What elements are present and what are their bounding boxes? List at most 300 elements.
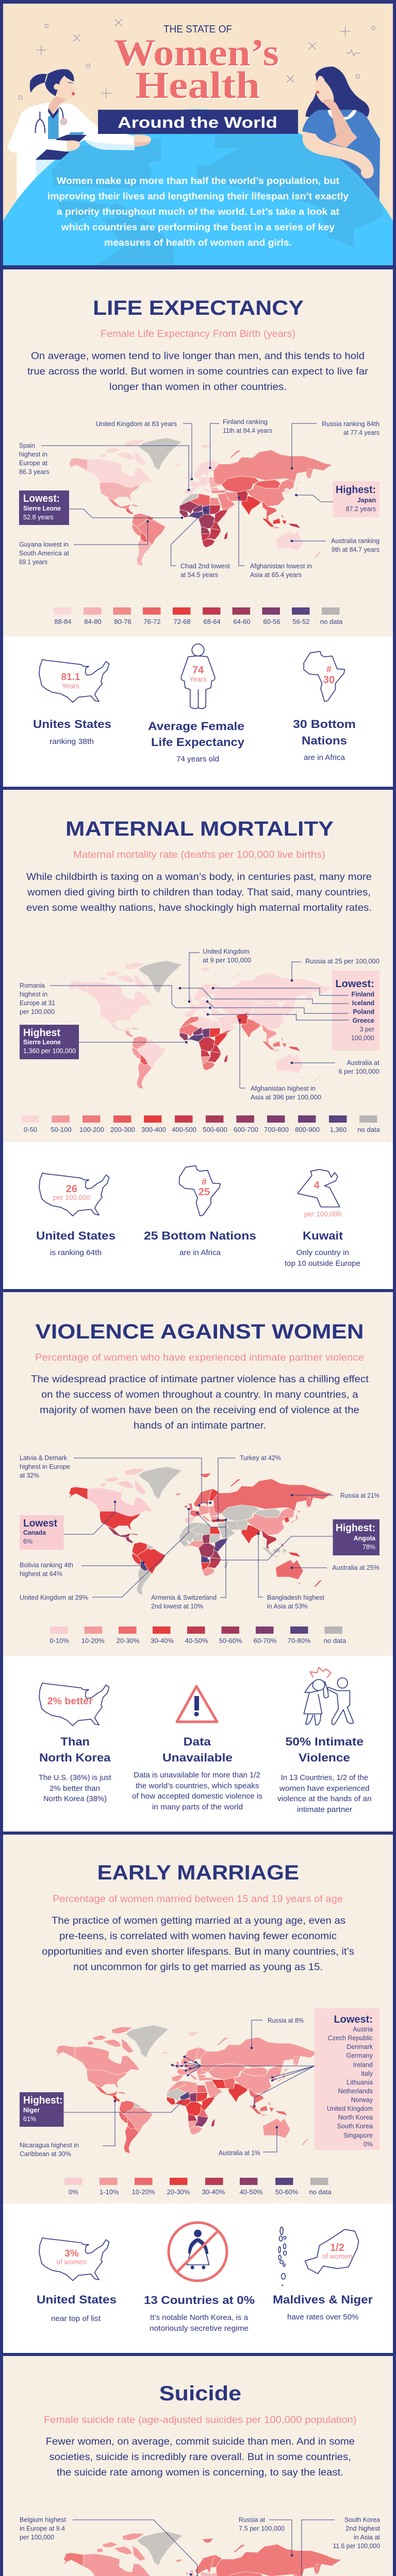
- text block: the suicide rate among women is concerning, to say the least.: [57, 2467, 343, 2478]
- stat: us years: [61, 672, 80, 690]
- callout: russia: [291, 1492, 380, 1499]
- callout: highest japan: Highest:: [336, 484, 376, 496]
- callout: turkey: Turkey at 42%: [240, 1454, 281, 1462]
- intro text: measures of health of women and girls.: [104, 237, 292, 248]
- callout: finland: Finland ranking: [223, 418, 268, 426]
- legend: no data: [324, 1637, 346, 1645]
- world map: life expectancy: [69, 438, 332, 566]
- callout: south korea: South Korea: [344, 2516, 380, 2523]
- stat heading: bottom nations: are in Africa: [304, 753, 345, 762]
- callout: romania: [20, 982, 211, 1015]
- icon: female figure: [181, 644, 215, 708]
- stat: rank 25: 25: [199, 1187, 210, 1198]
- callout: armenia and switzerland: Armenia & Switzerland: [151, 1594, 217, 1601]
- stat: us percent: [57, 2248, 87, 2266]
- legend: 0-10%: [50, 1637, 69, 1645]
- legend: 80-76: [114, 618, 131, 625]
- callout: latvia and denmark: Latvia & Demark: [20, 1454, 68, 1462]
- callout: lowest sierra leone: Lowest:: [23, 493, 60, 504]
- callout: russia: [251, 2017, 304, 2049]
- callout: lowest list: Iceland: [352, 999, 374, 1007]
- text block: on the success of women throughout a country. In many countries, a: [41, 1389, 358, 1400]
- legend: 88-84: [54, 618, 72, 625]
- callout: afghanistan: [239, 1019, 321, 1101]
- legend: 60-70%: [254, 1637, 277, 1645]
- stat heading: kuwait: Kuwait: [303, 1229, 343, 1242]
- icon: africa outline: [304, 651, 345, 702]
- stat heading: bottom nations: [293, 718, 356, 762]
- stat heading: bottom nations: [144, 1229, 256, 1257]
- callout: highest niger: 61%: [23, 2115, 36, 2123]
- legend: 50-100: [51, 1126, 72, 1133]
- legend: 56-52: [292, 618, 310, 625]
- panel: life expectancy stats: [3, 637, 393, 787]
- heading: Suicide: [159, 2382, 241, 2405]
- callout: lowest list: North Korea: [338, 2114, 373, 2121]
- callout: highest sierra leone: 1,360 per 100,000: [23, 1047, 76, 1055]
- callout: lowest list: Lithuania: [346, 2079, 373, 2086]
- intro text: [47, 175, 349, 248]
- panel: violence stats: [3, 1656, 393, 1832]
- legend: 68-64: [203, 618, 221, 625]
- icon: no child bride: [169, 2223, 227, 2281]
- stat: kuwait rate: [304, 1180, 341, 1218]
- stat: rank 30: #: [326, 664, 332, 674]
- callout: south korea: in Asia at: [354, 2534, 381, 2541]
- callout: australia: [219, 2126, 278, 2157]
- text block: On average, women tend to live longer than men, and this tends to hold: [31, 351, 365, 362]
- text block: Fewer women, on average, commit suicide than men. And in some: [46, 2436, 355, 2447]
- callout: highest sierra leone: Sierre Leone: [23, 1039, 61, 1046]
- text block: societies, suicide is incredibly rare overall. But in some countries,: [50, 2452, 351, 2463]
- stat heading: thirteen countries: notoriously secretive regime: [150, 2324, 249, 2333]
- callout: australia: [291, 1564, 380, 1571]
- text block: not uncommon for girls to get married as young as 15.: [73, 1962, 323, 1973]
- stat: us rate: [53, 1183, 90, 1201]
- legend: 70-80%: [288, 1637, 311, 1645]
- stat heading: intimate violence: 50% Intimate: [286, 1735, 364, 1748]
- callout: guyana: 69.1 years: [19, 558, 47, 566]
- stat heading: intimate violence: women have experienced: [279, 1784, 369, 1793]
- stat heading: thirteen countries: It’s notable North Korea, is a: [150, 2313, 249, 2322]
- callout: bangladesh: in Asia at 53%: [267, 1603, 308, 1610]
- stat: kuwait rate: 4: [314, 1180, 320, 1191]
- stat heading: average: [148, 720, 245, 764]
- stat heading: united states: [37, 2293, 117, 2323]
- globe continents: [52, 135, 384, 265]
- callout: chad: at 54.5 years: [180, 571, 218, 579]
- callout: russia: Russia at 25 per 100,000: [305, 958, 380, 965]
- text block: The widespread practice of intimate partner violence has a chilling effect: [31, 1374, 369, 1385]
- stat heading: average: Life Expectancy: [151, 736, 245, 749]
- stat heading: intimate violence: In 13 Countries, 1/2 of the: [281, 1773, 368, 1782]
- callout: guyana: Guyana lowest in: [19, 541, 69, 548]
- text block: [27, 351, 369, 393]
- callout: bolivia: [20, 1562, 144, 1578]
- callout: lowest sierra leone: [19, 490, 183, 525]
- callout: russia: Russia at 8%: [268, 2017, 304, 2024]
- icon: kuwait outline: [298, 1170, 340, 1207]
- callout: highest japan: [295, 481, 380, 517]
- stat heading: intimate violence: Violence: [299, 1751, 350, 1764]
- text block: The practice of women getting married at a young age, even as: [52, 1916, 345, 1926]
- text block: While childbirth is taxing on a woman’s body, in centuries past, many more: [26, 872, 372, 883]
- callout: highest niger: [20, 2092, 187, 2127]
- callout: united kingdom: [96, 420, 193, 480]
- legend: 10-20%: [81, 1637, 105, 1645]
- intro text: improving their lives and lengthening their lifespan isn’t exactly: [47, 191, 349, 201]
- legend: 20-30%: [117, 1637, 140, 1645]
- callout: lowest list: Poland: [353, 1008, 374, 1015]
- icon: maldives islands: [278, 2227, 286, 2286]
- callout: highest sierra leone: [20, 1025, 188, 1059]
- legend: 100-200: [79, 1126, 104, 1133]
- callout: russia: Russia at: [239, 2516, 266, 2523]
- stat heading: than north korea: Than: [61, 1735, 90, 1748]
- stat heading: data unavailable: of how accepted domestic violence is: [132, 1792, 262, 1801]
- text block: [46, 2436, 355, 2478]
- legend: 0-50: [24, 1126, 37, 1133]
- heading: EARLY MARRIAGE: [97, 1861, 299, 1884]
- decorative medical symbols: [19, 19, 375, 99]
- callout: lowest canada: [20, 1501, 116, 1550]
- icon: violent couple: [304, 1668, 354, 1725]
- callout: belgium: [20, 2516, 199, 2576]
- stat: half of women: [322, 2242, 352, 2260]
- stat: us percent: of women: [57, 2258, 87, 2266]
- stat heading: intimate violence: violence at the hands of an: [277, 1794, 371, 1803]
- callout: lowest canada: 6%: [23, 1538, 32, 1545]
- world map: suicide: [63, 2531, 341, 2576]
- callout: spain: 86.3 years: [19, 468, 50, 476]
- callout: united kingdom: United Kingdom at 83 years: [96, 420, 177, 428]
- callout: lowest list: Italy: [361, 2070, 373, 2077]
- subtitle: Female Life Expectancy From Birth (years): [101, 329, 295, 340]
- panel: life expectancy: [3, 269, 393, 637]
- subtitle: Maternal mortality rate (deaths per 100,000 live births): [73, 850, 325, 860]
- panel: suicide: [3, 2356, 393, 2576]
- legend: 64-60: [233, 618, 251, 625]
- callout: australia: [291, 537, 380, 553]
- callout: afghanistan: [238, 497, 312, 579]
- stat: half of women: 1/2: [330, 2242, 344, 2253]
- stat: kuwait rate: per 100,000: [304, 1210, 341, 1218]
- stat heading: maldives and niger: [273, 2293, 373, 2321]
- legend: no data: [309, 2188, 332, 2196]
- stat: us rate: 26: [66, 1183, 77, 1195]
- panel: early marriage stats: [3, 2204, 393, 2353]
- callout: highest angola: Angola: [354, 1535, 376, 1542]
- stat heading: maldives and niger: have rates over 50%: [287, 2313, 359, 2321]
- callout: latvia and denmark: [20, 1454, 211, 1506]
- text block: pre-teens, is correlated with women having fewer economic: [59, 1931, 337, 1942]
- text block: women died giving birth to children than today. That said, many countries,: [27, 887, 371, 898]
- callout: highest niger: Highest:: [23, 2095, 63, 2106]
- callout: south korea: 2nd highest: [345, 2525, 381, 2532]
- callout: united kingdom: at 9 per 100,000: [203, 957, 251, 964]
- stat heading: data unavailable: Data is unavailable for more than 1/2: [134, 1771, 260, 1780]
- legend: no data: [320, 618, 343, 625]
- callout: lowest list: [171, 2008, 380, 2150]
- stat heading: data unavailable: Unavailable: [162, 1751, 233, 1764]
- legend: 20-30%: [167, 2188, 190, 2196]
- callout: romania: Europe at 31: [20, 999, 55, 1007]
- subtitle: Percentage of women who have experienced intimate partner violence: [35, 1352, 364, 1363]
- world map: maternal mortality: [69, 961, 332, 1089]
- callout: afghanistan: Afghanistan highest in: [251, 1085, 316, 1092]
- icon: africa outline: [179, 1166, 220, 1216]
- callout: finland: [209, 418, 272, 469]
- legend: 50-60%: [275, 2188, 299, 2196]
- legend: 10-20%: [132, 2188, 155, 2196]
- stat: average years: 74: [192, 665, 204, 676]
- legend: 500-600: [203, 1126, 227, 1133]
- stat heading: than north korea: North Korea: [39, 1751, 111, 1764]
- text block: even some wealthy nations, have shockingly high maternal mortality rates.: [26, 903, 372, 913]
- callout: lowest list: Lowest:: [334, 2014, 373, 2025]
- callout: russia: Russia ranking 84th: [322, 420, 380, 428]
- legend: 60-56: [263, 618, 280, 625]
- callout: lowest list: South Korea: [337, 2123, 373, 2130]
- stat heading: thirteen countries: 13 Countries at 0%: [144, 2294, 255, 2307]
- stat heading: thirteen countries: [144, 2294, 255, 2333]
- text block: majority of women have been on the receiving end of violence at the: [40, 1405, 359, 1416]
- callout: bangladesh: [257, 1533, 325, 1610]
- stat heading: kuwait: [285, 1229, 360, 1268]
- callout: latvia and denmark: highest in Europe: [20, 1463, 70, 1470]
- illustration: patient arms: [303, 99, 374, 179]
- callout: lowest list: United Kingdom: [327, 2105, 373, 2112]
- callout: turkey: [217, 1454, 281, 1521]
- callout: australia: Australia ranking: [331, 537, 380, 545]
- stat: two percent better: 2% better: [47, 1696, 93, 1707]
- callout: highest sierra leone: Highest: [23, 1027, 60, 1039]
- title: Health: [135, 64, 260, 107]
- callout: afghanistan: Asia at 396 per 100,000: [251, 1094, 321, 1101]
- legend: 30-40%: [151, 1637, 174, 1645]
- legend: 1,360: [330, 1126, 346, 1133]
- callout: armenia and switzerland: 2nd lowest at 10%: [151, 1603, 203, 1610]
- callout: highest angola: Highest:: [336, 1522, 375, 1534]
- title: [114, 24, 280, 108]
- legend: 400-500: [172, 1126, 196, 1133]
- legend: 0%: [69, 2188, 78, 2196]
- title: Women’s: [114, 32, 279, 74]
- callout: lowest list: Netherlands: [338, 2088, 373, 2095]
- callout: guyana: South America at: [19, 550, 70, 557]
- stat: us rate: per 100,000: [53, 1194, 90, 1201]
- legend: 40-50%: [185, 1637, 208, 1645]
- stat heading: united states: is ranking 64th: [50, 1248, 102, 1257]
- callout: highest niger: Niger: [23, 2107, 40, 2114]
- subtitle: Female suicide rate (age-adjusted suicides per 100,000 population): [44, 2415, 357, 2426]
- illustration: doctor arm and clipboard: [36, 120, 151, 160]
- callout: lowest list: 0%: [364, 2141, 373, 2148]
- illustration: patient body: [302, 66, 380, 201]
- intro text: a priority throughout much of the world. Let’s take a look at: [57, 206, 339, 217]
- stat heading: united states: United States: [37, 2293, 117, 2306]
- stat heading: bottom nations: 25 Bottom Nations: [144, 1229, 256, 1242]
- callout: bolivia: Bolivia ranking 4th: [20, 1562, 73, 1569]
- legend: 200-300: [110, 1126, 135, 1133]
- stat heading: data unavailable: Data: [184, 1735, 211, 1748]
- stat: us years: 81.1: [61, 672, 80, 683]
- text block: true across the world. But women in some countries can expect to live far: [27, 366, 369, 377]
- callout: lowest list: Lowest:: [335, 978, 374, 990]
- callout: russia: 7.5 per 100,000: [239, 2525, 285, 2532]
- intro text: which countries are performing the best in a series of key: [61, 222, 335, 232]
- callout: lowest sierra leone: 52.8 years: [23, 514, 54, 521]
- callout: spain: Europe at: [19, 460, 48, 467]
- callout: russia: [291, 420, 380, 469]
- callout: united kingdom: United Kingdom at 29%: [20, 1594, 88, 1601]
- stat heading: data unavailable: [132, 1735, 262, 1811]
- panel: violence against women: [3, 1292, 393, 1656]
- stat heading: united states: ranking 38th: [50, 737, 94, 746]
- icon: us outline: [39, 659, 109, 702]
- stat heading: intimate violence: intimate partner: [297, 1805, 352, 1814]
- legend: 84-80: [84, 618, 102, 625]
- callout: lowest list: 3 per: [360, 1026, 374, 1033]
- callout: latvia and denmark: at 32%: [20, 1472, 39, 1479]
- callout: lowest canada: Canada: [23, 1529, 46, 1536]
- callout: highest angola: [204, 1519, 380, 1561]
- stat: us percent: 3%: [64, 2248, 79, 2259]
- callout: spain: [19, 442, 190, 491]
- callout: australia: [291, 1059, 380, 1075]
- callout: chad: Chad 2nd lowest: [180, 563, 230, 570]
- callout: australia: 6 per 100,000: [338, 1068, 380, 1075]
- callout: lowest list: Finland: [352, 991, 374, 998]
- callout: spain: highest in: [19, 451, 47, 458]
- stat heading: average: 74 years old: [176, 755, 219, 764]
- callout: lowest list: 100,000: [351, 1035, 374, 1042]
- callout: lowest list: Denmark: [346, 2043, 373, 2050]
- callout: australia: Australia at: [346, 1059, 380, 1066]
- icon: us outline: [39, 1173, 109, 1216]
- callout: russia: Russia at 21%: [340, 1492, 380, 1499]
- heading: LIFE EXPECTANCY: [93, 297, 304, 319]
- legend: 800-900: [295, 1126, 320, 1133]
- callout: russia: [239, 2516, 293, 2556]
- callout: highest japan: 87.2 years: [346, 505, 376, 513]
- stat heading: than north korea: [39, 1735, 111, 1803]
- world map: violence: [69, 1467, 332, 1595]
- stat: us years: Years: [62, 682, 79, 690]
- callout: bolivia: highest at 64%: [20, 1570, 62, 1578]
- callout: lowest list: Norway: [351, 2096, 373, 2104]
- stat heading: united states: [33, 718, 111, 746]
- callout: afghanistan: Afghanistan lowest in: [250, 563, 312, 570]
- callout: russia: at 77.4 years: [343, 429, 380, 436]
- panel: early marriage: [3, 1835, 393, 2204]
- banner: around the world: Around the World: [118, 113, 277, 131]
- stat heading: than north korea: The U.S. (36%) is just: [39, 1773, 111, 1782]
- title: Women’s: [115, 33, 280, 75]
- callout: australia: Australia at 25%: [332, 1564, 380, 1571]
- stat: rank 30: 30: [323, 674, 335, 686]
- panel: hero: [3, 4, 393, 265]
- legend: 50-60%: [219, 1637, 242, 1645]
- callout: nicaragua: [20, 2100, 116, 2158]
- callout: south korea: [292, 2516, 381, 2576]
- stat: average years: Years: [189, 675, 207, 683]
- callout: australia: Australia at 1%: [219, 2149, 260, 2157]
- callout: romania: Romania: [20, 982, 45, 989]
- callout: chad: [171, 509, 230, 579]
- banner: around the world: [98, 110, 298, 134]
- stat heading: united states: [36, 1229, 116, 1257]
- stat heading: united states: near top of list: [51, 2314, 101, 2323]
- callout: south korea: 11.6 per 100,000: [333, 2543, 380, 2550]
- callout: highest angola: 78%: [362, 1544, 375, 1551]
- subtitle: Percentage of women married between 15 and 19 years of age: [53, 1894, 343, 1905]
- stat heading: kuwait: Only country in: [296, 1248, 349, 1257]
- legend: [21, 1115, 380, 1133]
- callout: russia: [291, 958, 380, 981]
- stat heading: bottom nations: 30 Bottom: [293, 718, 356, 731]
- legend: [64, 2178, 332, 2196]
- icon: us outline: [39, 2238, 109, 2281]
- text block: [31, 1374, 369, 1431]
- stat heading: united states: Unites States: [33, 718, 111, 731]
- callout: united kingdom: United Kingdom: [203, 948, 250, 955]
- callout: belgium: per 100,000: [20, 2534, 54, 2541]
- stat heading: intimate violence: [277, 1735, 371, 1814]
- legend: 76-72: [143, 618, 161, 625]
- callout: nicaragua: Caribbean at 30%: [20, 2150, 71, 2158]
- callout: spain: Spain: [19, 442, 35, 449]
- globe: [3, 109, 393, 265]
- panel: maternal stats: [3, 1142, 393, 1289]
- stat: half of women: of women: [322, 2252, 352, 2260]
- icon: warning triangle: [177, 1686, 217, 1722]
- callout: finland: 11th at 84.4 years: [223, 427, 272, 434]
- legend: 600-700: [234, 1126, 258, 1133]
- legend: [50, 1626, 346, 1645]
- legend: 40-50%: [240, 2188, 263, 2196]
- legend: 30-40%: [202, 2188, 225, 2196]
- callout: belgium: in Europe at 9.4: [20, 2525, 65, 2532]
- illustration: doctor body: [8, 69, 101, 199]
- callout: armenia and switzerland: [151, 1512, 227, 1610]
- callout: lowest list: Germany: [346, 2052, 373, 2059]
- world map: early marriage: [56, 2025, 319, 2154]
- callout: lowest list: Ireland: [353, 2061, 373, 2069]
- intro text: Women make up more than half the world’s population, but: [57, 175, 339, 186]
- callout: lowest list: Singapore: [343, 2132, 373, 2139]
- legend: 700-800: [264, 1126, 289, 1133]
- legend: 1-10%: [100, 2188, 119, 2196]
- title: Health: [136, 65, 261, 108]
- callout: australia: 9th at 84.7 years: [332, 546, 380, 553]
- stat heading: bottom nations: Nations: [302, 734, 347, 747]
- callout: lowest sierra leone: Sierre Leone: [23, 505, 61, 512]
- callout: united kingdom: [188, 948, 251, 1003]
- icon: niger outline: [305, 2229, 359, 2274]
- stat: rank 30: [323, 664, 335, 686]
- callout: lowest list: [179, 971, 380, 1050]
- callout: guyana: [19, 520, 149, 566]
- stat heading: maldives and niger: Maldives & Niger: [273, 2293, 373, 2306]
- callout: lowest list: Greece: [353, 1017, 374, 1024]
- stat heading: average: Average Female: [148, 720, 244, 733]
- stat: average years: [189, 665, 207, 683]
- legend: 300-400: [141, 1126, 166, 1133]
- stat heading: data unavailable: in many parts of the world: [152, 1803, 243, 1811]
- text block: longer than women in other countries.: [109, 382, 287, 393]
- icon: us outline: [39, 1683, 109, 1726]
